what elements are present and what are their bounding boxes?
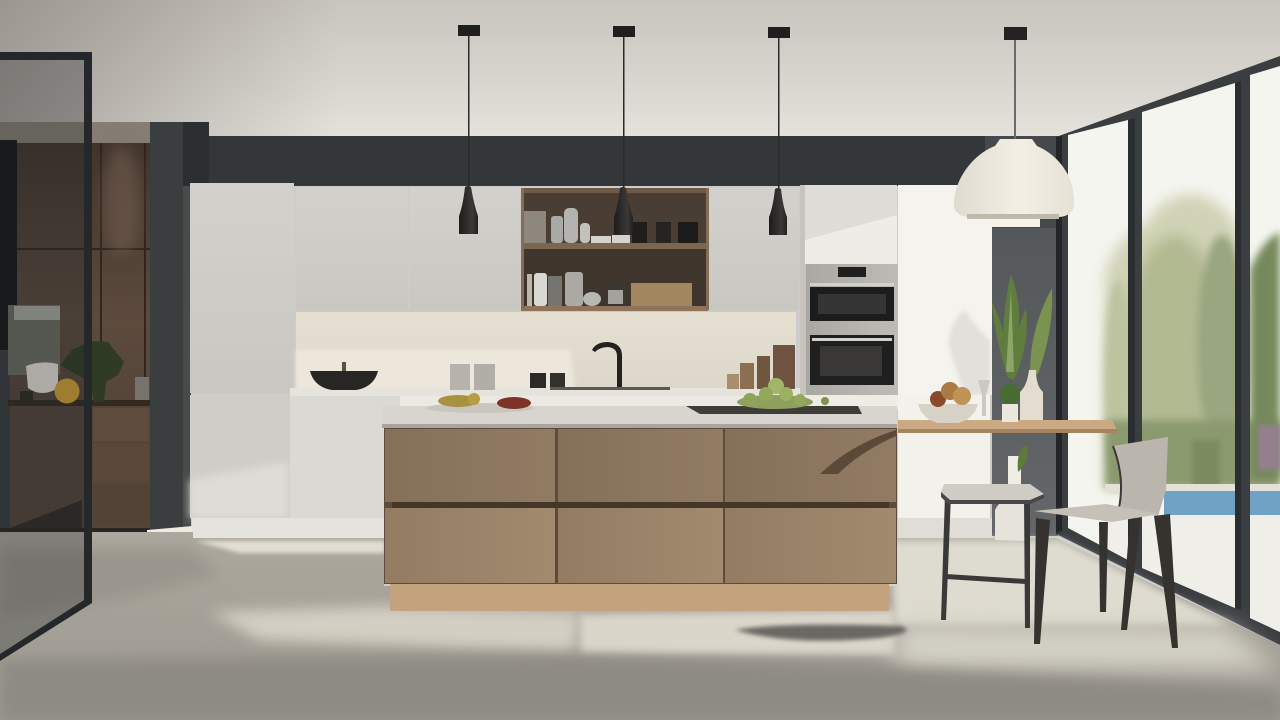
sideboard objects (8, 305, 149, 404)
pendant lamps (458, 25, 790, 235)
floor (0, 532, 1280, 720)
ovens (806, 264, 898, 395)
plant and fruit bowl (918, 274, 1052, 423)
fruit plates on island (426, 378, 862, 414)
ceiling (0, 0, 1280, 142)
chair (1034, 437, 1178, 648)
windows with garden view (1056, 56, 1280, 645)
dark wall band (208, 136, 1060, 228)
large white pendant lamp (954, 27, 1074, 227)
dining table shelf (898, 420, 1117, 433)
bar stool (941, 484, 1044, 628)
lower cabinets (190, 395, 993, 538)
vase on floor (995, 445, 1028, 541)
glass partition (0, 52, 92, 661)
kitchen island (382, 406, 897, 611)
backsplash (290, 309, 800, 396)
bowl and faucet (310, 342, 795, 390)
open shelf (521, 188, 709, 311)
panel: left wood wall (0, 122, 150, 535)
right grey wall (992, 228, 1058, 536)
panel: upper cabinets (190, 183, 992, 395)
left sideboard (0, 400, 150, 532)
dark column (147, 122, 209, 543)
